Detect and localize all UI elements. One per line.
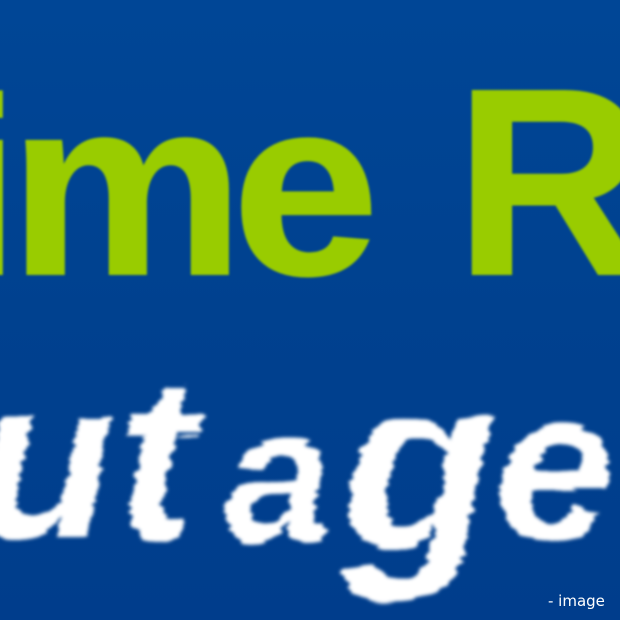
heading: green title fragment: e — [232, 46, 379, 328]
heading: green title fragment: m — [9, 46, 244, 328]
heading: green title fragment — [0, 34, 620, 331]
subheading: distorted white italic word: a — [224, 368, 331, 583]
subheading: distorted white italic word: t — [117, 325, 204, 588]
subheading: distorted white italic word: e — [495, 345, 615, 586]
subheading: distorted white italic word: g — [341, 324, 495, 603]
caption: image note: - image — [548, 592, 605, 610]
